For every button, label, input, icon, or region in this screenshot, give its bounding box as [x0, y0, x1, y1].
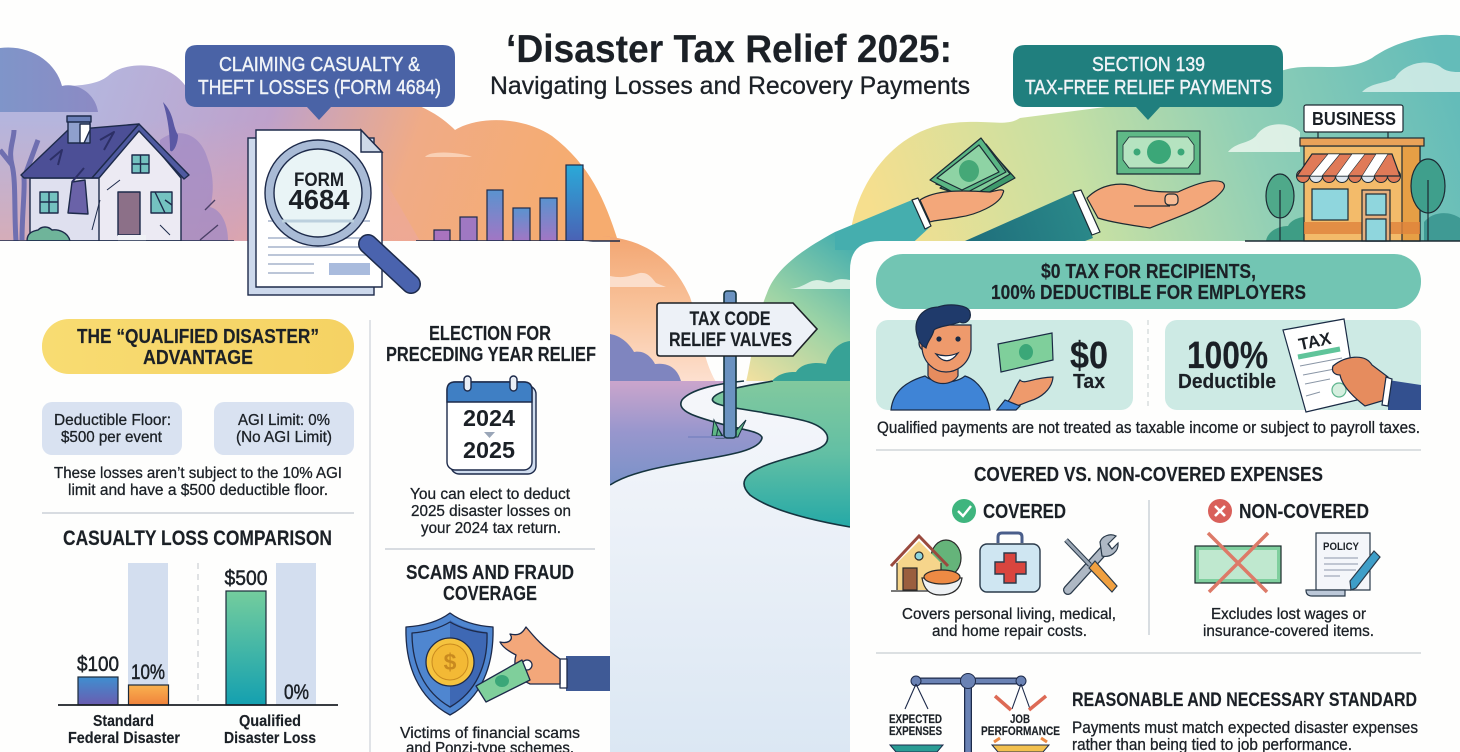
bar chart: casualty loss: Qualified — [239, 713, 301, 730]
icon: balance scale: PERFORMANCE — [981, 726, 1060, 738]
text: election explanation — [410, 486, 571, 537]
text: scams explanation — [400, 725, 580, 752]
icon: balance scale — [889, 674, 1060, 752]
icon: shield, coin and hand with cash: $ — [444, 649, 457, 675]
heading: casualty loss comparison: CASUALTY LOSS COMPARISON — [63, 527, 332, 550]
card: zero tax recipient — [876, 305, 1133, 410]
heading: election for preceding year relief: PRECEDING YEAR RELIEF — [386, 344, 596, 366]
bar chart: casualty loss: 0% — [284, 681, 309, 704]
banner: zero tax, fully deductible: $0 TAX FOR RECIPIENTS, — [1041, 261, 1256, 283]
bar chart: casualty loss: Federal Disaster — [68, 730, 180, 747]
callout: qualified disaster advantage: THE “QUALIFIED DISASTER” — [77, 326, 319, 348]
heading: scams and fraud coverage: COVERAGE — [443, 583, 537, 605]
signpost: tax code relief valves: TAX CODE — [690, 309, 770, 330]
heading: covered vs non-covered: COVERED VS. NON-COVERED EXPENSES — [974, 464, 1323, 486]
section: covered: COVERED — [983, 501, 1066, 523]
cloud: right top — [1362, 63, 1460, 92]
bar chart: casualty loss: 10% — [131, 661, 165, 684]
card: zero tax recipient: $0 — [1070, 335, 1108, 377]
section: non-covered — [1195, 499, 1380, 640]
stat box: AGI limit: (No AGI Limit) — [236, 429, 332, 446]
section: non-covered: insurance-covered items. — [1203, 623, 1374, 640]
road edges — [610, 381, 850, 527]
signpost: tax code relief valves: RELIEF VALVES — [669, 330, 792, 351]
left sky scene background — [0, 47, 618, 241]
heading bubble: section 139: SECTION 139 — [1092, 54, 1205, 76]
icon: business storefront — [1245, 105, 1460, 241]
icon: calendar 2024 to 2025: 2024 — [463, 405, 515, 431]
icon: home and food — [891, 536, 962, 595]
bar chart: casualty loss: Standard — [93, 713, 154, 730]
text: reasonable and necessary standard: Payments must match expected disaster expenses — [1072, 718, 1418, 737]
signpost: tax code relief valves — [657, 291, 817, 438]
banner: zero tax, fully deductible — [876, 254, 1421, 309]
text: election explanation: your 2024 tax return. — [421, 520, 561, 537]
left land — [610, 381, 762, 485]
cash stack — [930, 138, 1015, 200]
icon: form 4684 with magnifier — [248, 130, 411, 295]
heading: election for preceding year relief — [386, 323, 596, 366]
icon: balance scale: JOB — [1010, 714, 1030, 726]
cloud: peach — [610, 273, 666, 287]
text: AGI explanation: These losses aren’t subject to the 10% AGI — [54, 465, 342, 482]
heading: scams and fraud coverage — [406, 562, 574, 605]
stat box: AGI limit — [214, 402, 354, 455]
icon: damaged house — [0, 102, 234, 241]
heading bubble: claiming casualty — [185, 45, 455, 120]
stat box: deductible floor: Deductible Floor: — [54, 412, 171, 429]
icon: tax document in hand — [1283, 319, 1421, 412]
stat box: deductible floor: $500 per event — [61, 429, 163, 446]
distant hill — [1424, 213, 1460, 241]
centre river valley scene — [600, 232, 860, 752]
text: election explanation: 2025 disaster losses on — [411, 503, 571, 520]
bar chart: casualty loss: $500 — [224, 567, 268, 590]
right sky scene background — [850, 35, 1460, 241]
section: covered: Covers personal living, medical, — [902, 606, 1116, 623]
icon: bar trend chart — [416, 165, 620, 241]
awning scallops — [1296, 170, 1400, 182]
icon: shield, coin and hand with cash — [406, 613, 610, 715]
section: non-covered: NON-COVERED — [1239, 501, 1369, 523]
bar chart: casualty loss: $100 — [77, 653, 119, 676]
icon: calendar 2024 to 2025: 2025 — [463, 437, 515, 463]
text: AGI explanation: limit and have a $500 deductible floor. — [68, 482, 328, 499]
teal cloud — [772, 341, 850, 381]
title: ‘Disaster Tax Relief 2025: — [506, 28, 952, 71]
icon: smiling person — [891, 305, 1053, 410]
icon: calendar 2024 to 2025 — [447, 376, 536, 474]
banner: zero tax, fully deductible: 100% DEDUCTIBLE FOR EMPLOYERS — [991, 282, 1306, 304]
callout: qualified disaster advantage: ADVANTAGE — [143, 347, 253, 369]
callout: qualified disaster advantage — [42, 319, 354, 374]
title — [490, 28, 970, 100]
card: fully deductible employer — [1165, 319, 1421, 412]
purple cloud — [610, 334, 681, 381]
icon: form 4684 with magnifier: 4684 — [288, 184, 350, 215]
heading: election for preceding year relief: ELECTION FOR — [429, 323, 551, 345]
panel: left white panel — [0, 241, 610, 752]
stat box: deductible floor — [42, 402, 182, 455]
title: Navigating Losses and Recovery Payments — [490, 72, 970, 100]
icon: crossed-out paycheck — [1195, 533, 1281, 592]
stat box: AGI limit: AGI Limit: 0% — [238, 412, 330, 429]
right land — [712, 381, 850, 527]
icon: wrench and screwdriver — [1066, 535, 1118, 592]
text: reasonable and necessary standard — [1072, 690, 1418, 752]
bar chart: casualty loss — [58, 563, 338, 747]
icon: policy and pen: POLICY — [1323, 541, 1360, 553]
card: zero tax recipient: Tax — [1073, 371, 1105, 393]
section: covered — [891, 499, 1118, 640]
card: fully deductible employer: 100% — [1187, 335, 1268, 377]
sleeve: left arm — [835, 200, 930, 250]
icon: red cross — [1208, 499, 1232, 523]
icon: balance scale: EXPECTED — [889, 714, 942, 726]
text: scams explanation: Victims of financial scams — [400, 725, 580, 742]
icon: form 4684 with magnifier: FORM — [294, 170, 344, 191]
heading bubble: section 139 — [1013, 45, 1283, 120]
cloud: pale green — [790, 279, 850, 289]
icon: policy and pen — [1306, 533, 1380, 596]
cloud: near shop — [1228, 124, 1300, 152]
heading bubble: claiming casualty: THEFT LOSSES (FORM 4684) — [198, 77, 441, 99]
heading bubble: section 139: TAX-FREE RELIEF PAYMENTS — [1025, 77, 1272, 99]
heading: scams and fraud coverage: SCAMS AND FRAUD — [406, 562, 574, 584]
text: election explanation: You can elect to deduct — [410, 486, 571, 503]
icon: business storefront: BUSINESS — [1312, 109, 1396, 129]
icon: open hands with cash — [835, 131, 1224, 250]
heading bubble: claiming casualty: CLAIMING CASUALTY & — [219, 54, 421, 76]
icon: green check — [952, 499, 976, 523]
section: covered: and home repair costs. — [932, 623, 1087, 640]
icon: tax document in hand: TAX — [1297, 329, 1333, 354]
section: non-covered: Excludes lost wages or — [1211, 606, 1367, 623]
bar chart: casualty loss: Disaster Loss — [224, 730, 316, 747]
bill above right hand — [1117, 131, 1200, 174]
panel: right white panel — [850, 241, 1460, 752]
card: fully deductible employer: Deductible — [1178, 371, 1276, 393]
icon: balance scale: EXPENSES — [889, 726, 942, 738]
text: AGI explanation — [54, 465, 342, 499]
icon: first aid kit — [980, 533, 1040, 592]
